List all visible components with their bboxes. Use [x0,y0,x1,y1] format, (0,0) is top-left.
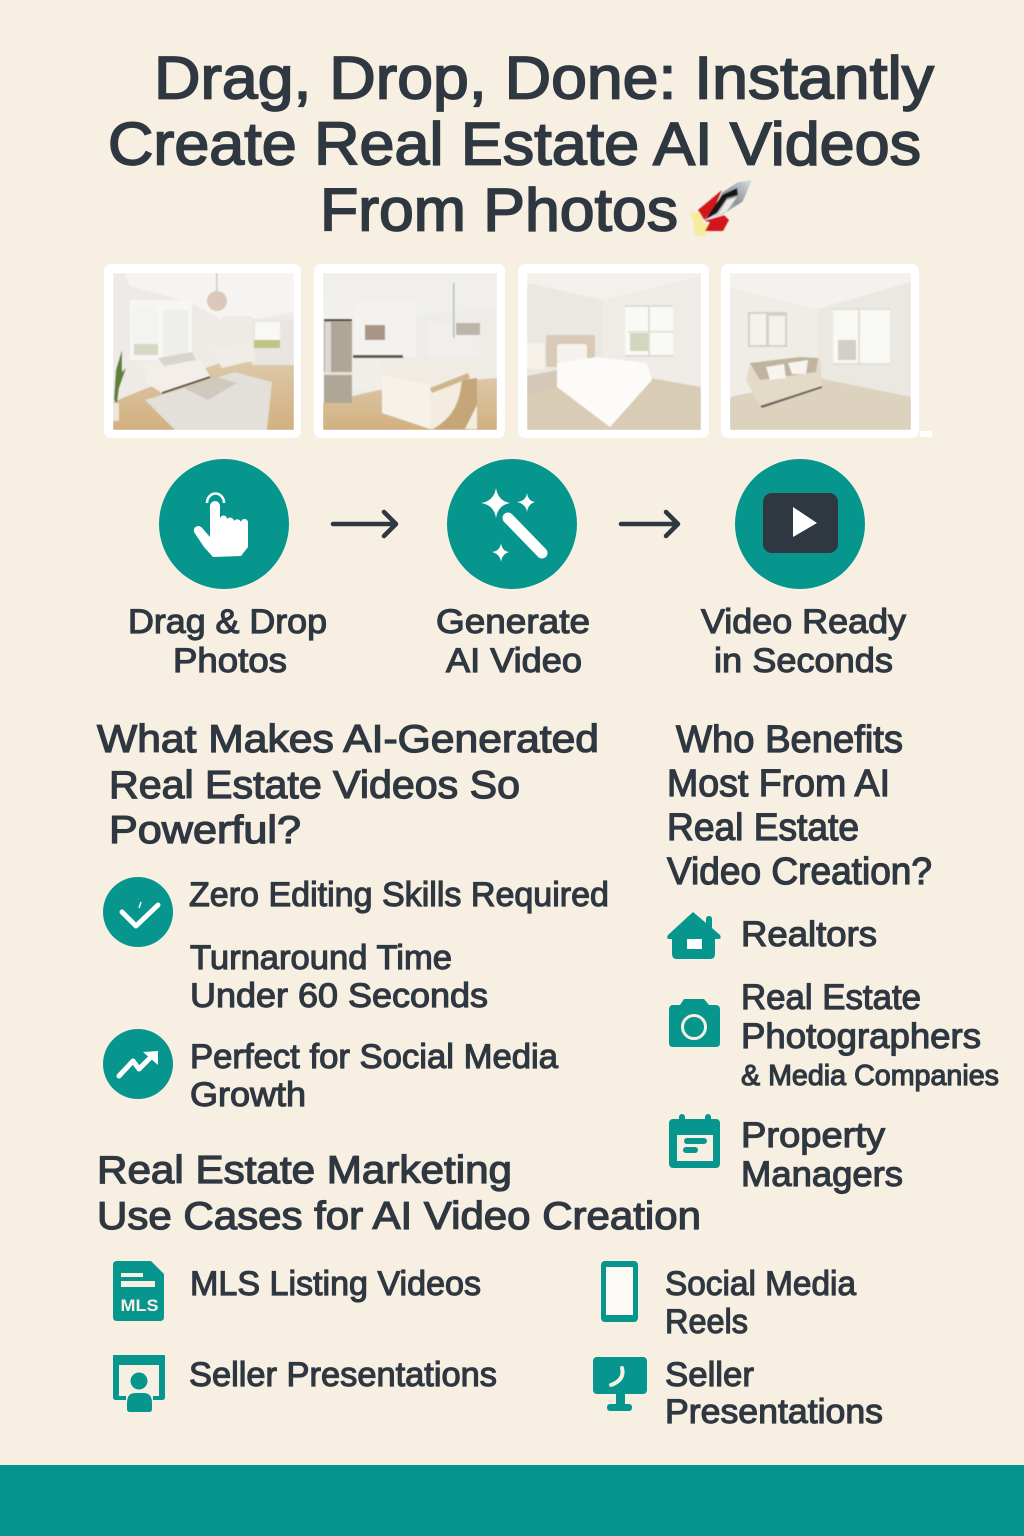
use case: seller presentations call: Seller [665,1356,754,1394]
audience: photographers: Real Estate [741,978,921,1017]
icon: trend arrow [103,1029,173,1099]
heading: use cases [97,1149,701,1238]
step label: Drag & Drop [128,603,327,641]
photo: lounge [721,264,932,438]
arrow [333,512,396,536]
icon: hand pointer [159,459,289,589]
heading: use cases: Use Cases for AI Video Creation [97,1195,701,1238]
title: Drag, Drop, Done: Instantly [154,44,934,112]
audience: realtors [667,912,877,959]
icon: calendar [669,1114,720,1168]
icon: presenter [113,1355,165,1412]
use case: MLS listing videos [113,1261,481,1321]
step 1: drag and drop [128,459,327,680]
benefit: zero editing skills [103,876,609,947]
icon: camera [669,999,720,1047]
benefit: social media growth: Perfect for Social Media [190,1038,558,1076]
icon: check [103,877,173,947]
heading: what makes videos powerful [97,718,599,852]
use case: seller presentations: Seller Presentations [189,1356,497,1394]
benefit: social media growth [103,1029,558,1114]
benefit: turnaround time [190,939,488,1015]
title: Create Real Estate AI Videos [108,110,921,178]
benefit: turnaround time: Turnaround Time [190,939,452,977]
heading: who benefits: Real Estate [667,807,859,849]
audience: property managers [669,1114,903,1194]
use case: seller presentations call [593,1356,883,1431]
arrow [621,512,678,536]
benefit: turnaround time: Under 60 Seconds [190,977,488,1015]
use case: seller presentations [113,1355,497,1412]
benefit: social media growth: Growth [190,1076,306,1114]
use case: social media reels: Reels [665,1303,748,1341]
photo: bedroom [518,264,709,438]
step label [436,603,590,680]
heading: who benefits [667,719,932,893]
heading: who benefits: Who Benefits [676,719,903,761]
photo: living room [104,264,301,438]
title [108,44,934,244]
icon: magic wand [447,459,577,589]
use case: MLS listing videos: MLS Listing Videos [190,1265,481,1303]
heading: what makes videos powerful: Real Estate Videos So [109,764,520,807]
step label: AI Video [446,642,582,680]
audience: photographers: Photographers [741,1017,981,1056]
audience: realtors: Realtors [741,915,877,954]
audience: photographers: & Media Companies [741,1060,999,1092]
step label: Generate [436,603,590,641]
icon: MLS document [113,1261,164,1321]
benefit: zero editing skills: Zero Editing Skills Required [189,876,609,914]
photo: kitchen [314,264,505,438]
use case: seller presentations call: Presentations [665,1393,883,1431]
step label: Photos [173,642,287,680]
step 2: generate [436,459,590,680]
step label: Video Ready [701,603,906,641]
heading: who benefits: Most From AI [667,763,890,805]
step 3: video ready [701,459,906,680]
icon: house [667,912,721,959]
icon: MLS document: MLS [120,1296,158,1315]
use case: social media reels: Social Media [665,1265,856,1303]
footer band [0,1465,1024,1536]
heading: who benefits: Video Creation? [667,851,932,893]
use case: social media reels [601,1261,856,1341]
step label [128,603,327,680]
icon: monitor with handset [593,1357,647,1411]
photo strip [104,264,932,438]
audience: property managers: Property [741,1116,886,1155]
step label: in Seconds [714,642,893,680]
icon: phone [601,1261,638,1322]
title: From Photos [320,176,678,244]
icon: rocket [690,179,753,237]
heading: what makes videos powerful: What Makes AI-Generated [97,718,599,761]
step label [701,603,906,680]
heading: use cases: Real Estate Marketing [97,1149,512,1192]
audience: photographers [669,978,999,1092]
audience: property managers: Managers [741,1155,903,1194]
icon: play button [735,459,865,589]
heading: what makes videos powerful: Powerful? [109,809,301,852]
